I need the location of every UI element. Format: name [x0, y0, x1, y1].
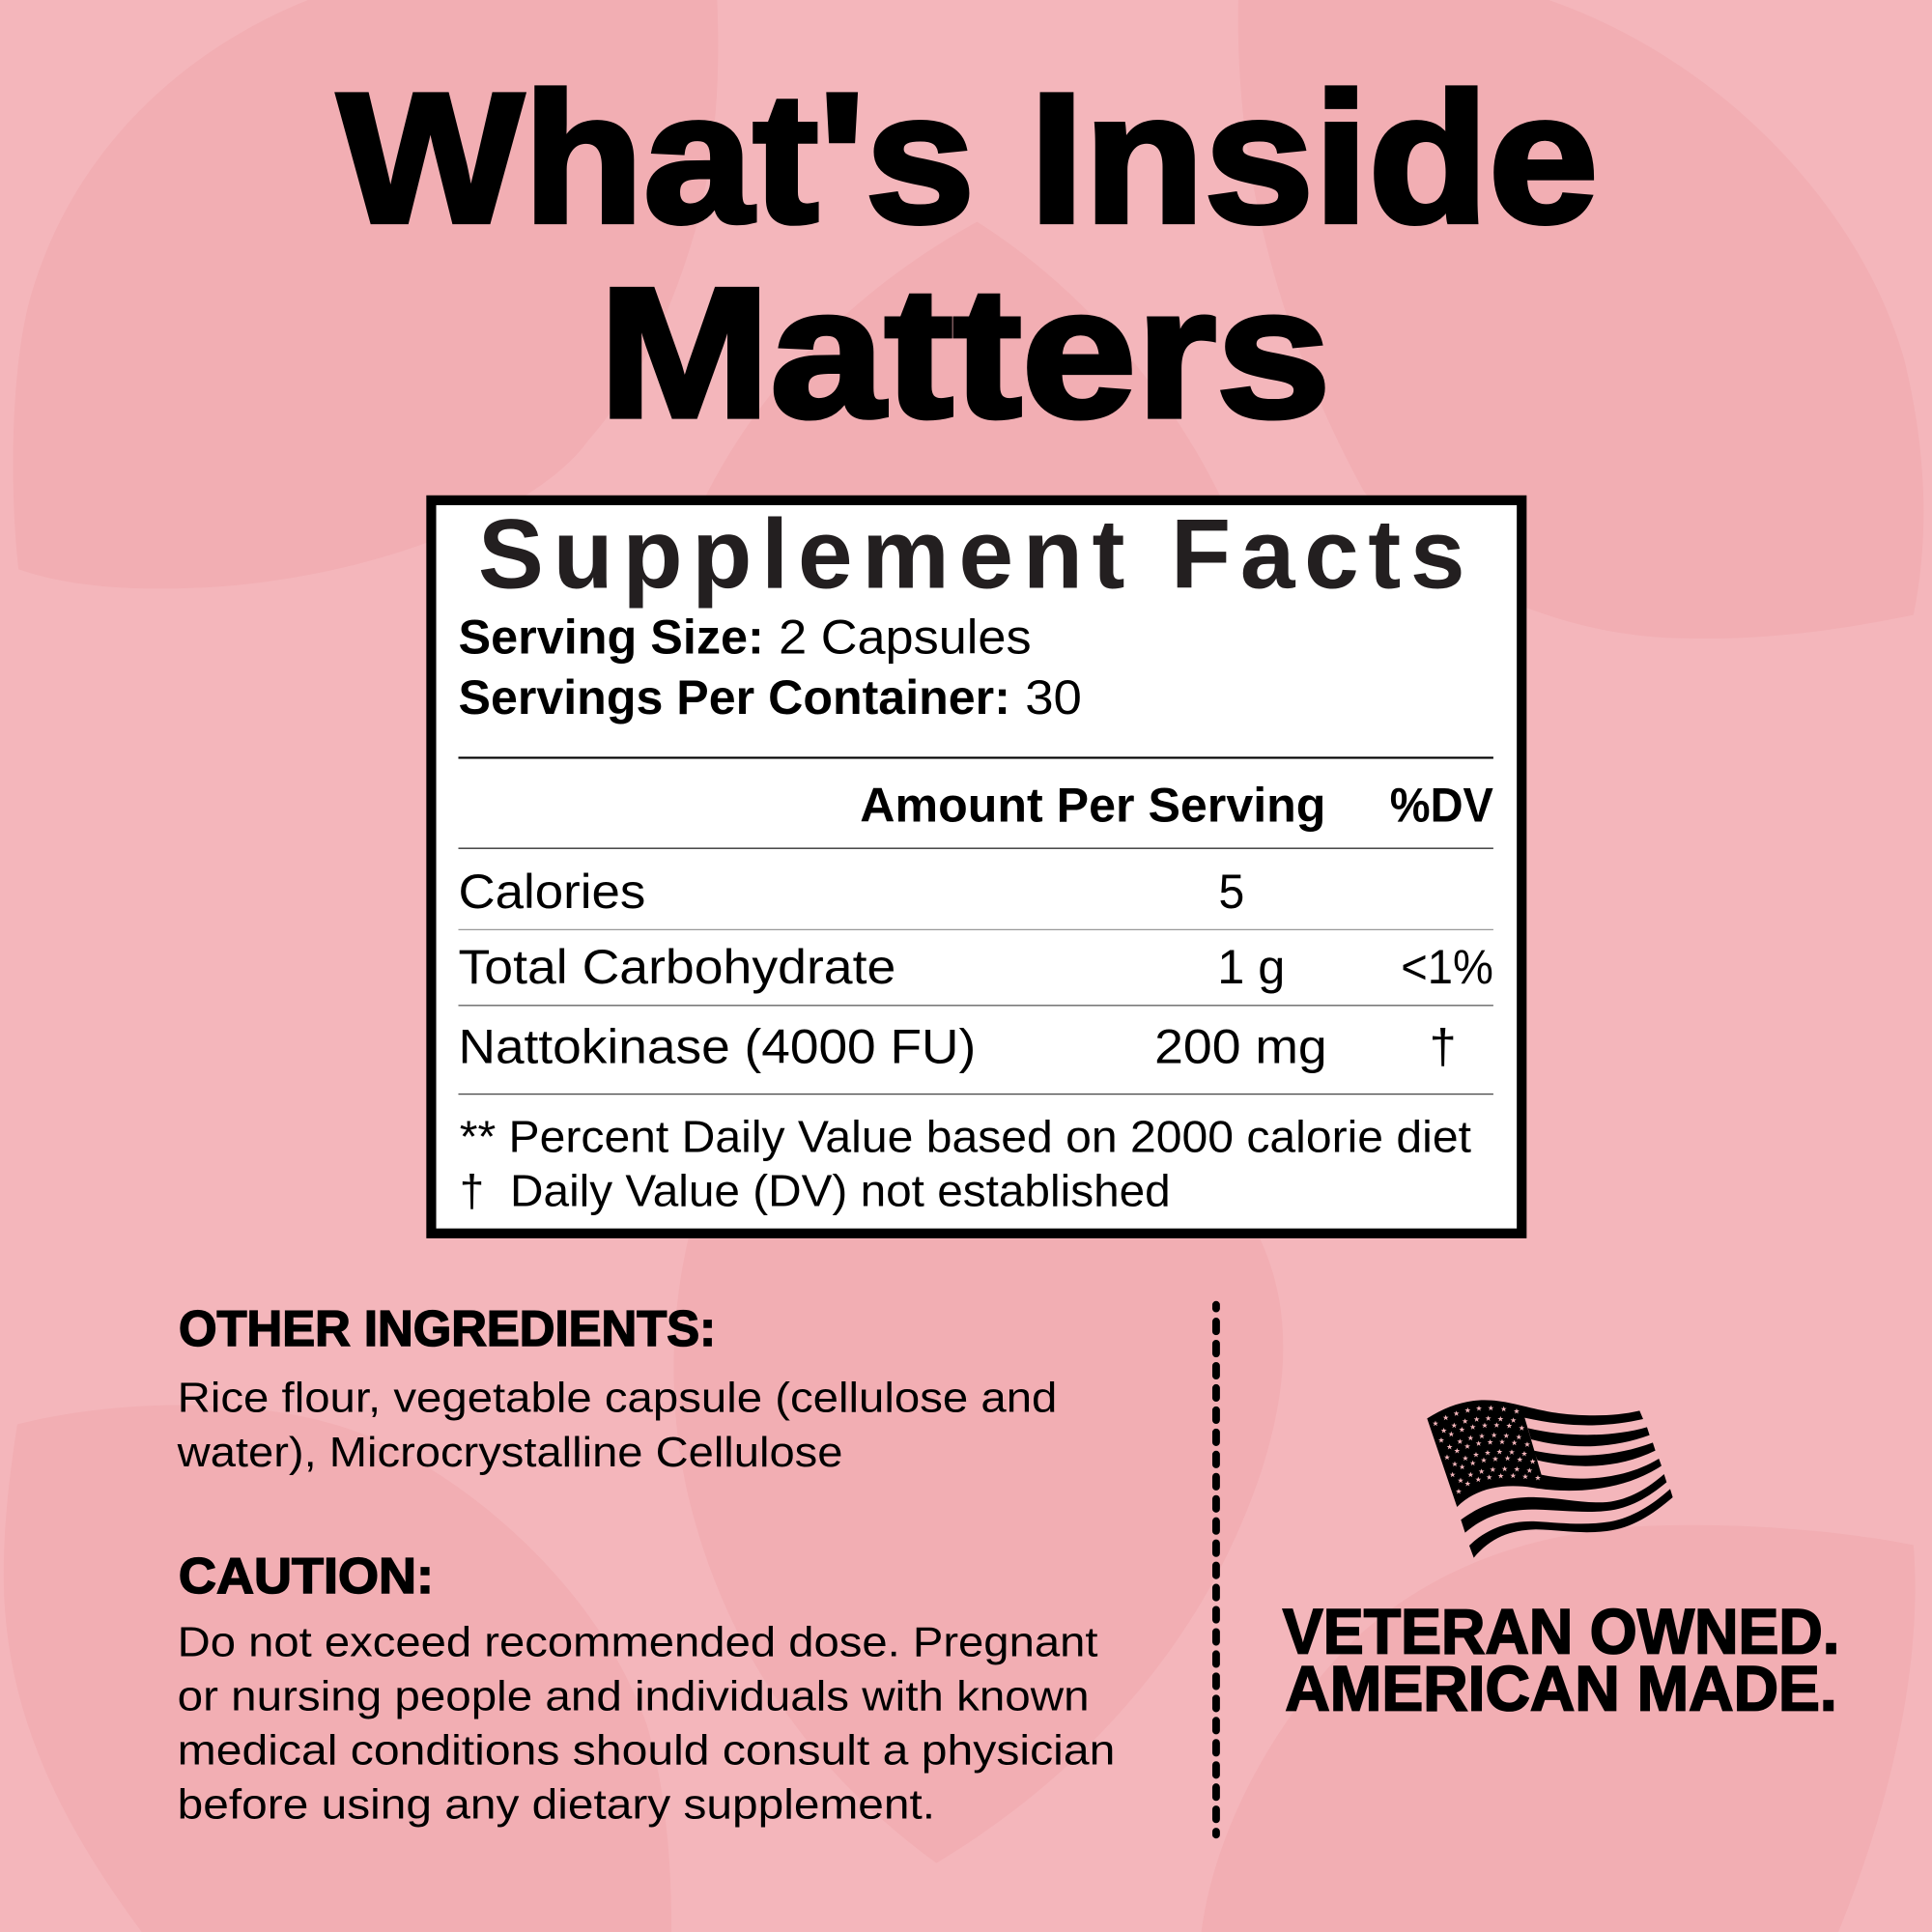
footnotes: † [460, 1166, 484, 1216]
heading: supplement facts: Supplement Facts [478, 498, 1465, 609]
table header: %DV [1390, 779, 1493, 833]
serving info: 30 [1025, 670, 1082, 724]
title: Matters [599, 249, 1331, 456]
tagline [1283, 1597, 1839, 1724]
text block: caution: Do not exceed recommended dose. Pregnant [178, 1619, 1097, 1665]
text block: caution: CAUTION: [179, 1548, 434, 1605]
tagline: VETERAN OWNED. [1283, 1597, 1839, 1668]
row: calories [458, 865, 1244, 919]
serving info: Servings Per Container: [458, 670, 1010, 724]
row: calories: Calories [458, 865, 645, 919]
title: What's Inside [337, 55, 1598, 262]
text block: other ingredients: OTHER INGREDIENTS: [179, 1301, 716, 1357]
serving info [458, 611, 1082, 724]
icon: american flag [1427, 1400, 1673, 1558]
footnotes [460, 1112, 1471, 1216]
footnotes: Daily Value (DV) not established [510, 1166, 1171, 1216]
table header: Amount Per Serving [860, 779, 1325, 833]
text block: caution [178, 1548, 1115, 1829]
text block: other ingredients: Rice flour, vegetable capsule (cellulose and [178, 1376, 1057, 1422]
panel: supplement facts [431, 498, 1521, 1234]
text block: caution: medical conditions should consult a physician [178, 1728, 1115, 1775]
row: nattokinase: Nattokinase (4000 FU) [458, 1020, 976, 1074]
row: nattokinase: 200 mg [1154, 1020, 1327, 1074]
row: total carbohydrate [458, 940, 1493, 994]
footnotes: ** Percent Daily Value based on 2000 calorie diet [460, 1112, 1471, 1162]
serving info: Serving Size: [458, 611, 764, 665]
row: nattokinase [458, 1020, 1457, 1074]
tagline: AMERICAN MADE. [1285, 1653, 1837, 1724]
row: total carbohydrate: Total Carbohydrate [458, 940, 895, 994]
text block: caution: or nursing people and individuals with known [178, 1673, 1090, 1719]
row: calories: 5 [1218, 865, 1244, 919]
text block: other ingredients [177, 1301, 1057, 1476]
row: total carbohydrate: <1% [1401, 940, 1493, 994]
serving info: 2 Capsules [779, 611, 1032, 665]
text block: caution: before using any dietary supplement. [178, 1782, 935, 1829]
row: nattokinase: † [1430, 1020, 1457, 1074]
row: total carbohydrate: 1 g [1217, 940, 1285, 994]
text block: other ingredients: water), Microcrystalline Cellulose [177, 1430, 842, 1476]
title [337, 55, 1598, 456]
